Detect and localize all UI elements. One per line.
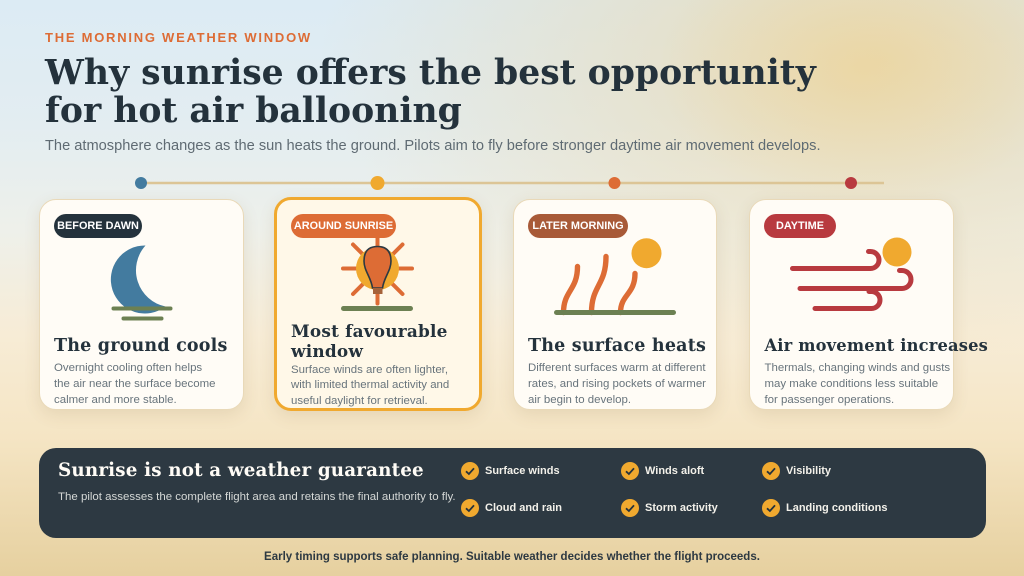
description [291,364,449,406]
description: for passenger operations. [764,394,894,406]
panel: daytime [749,198,954,410]
panel: later morning [512,198,716,410]
badge: around sunrise: AROUND SUNRISE [294,220,393,232]
heading: The surface heats [528,336,706,356]
item: cloud and rain [461,499,562,517]
item: landing conditions: Landing conditions [786,502,887,514]
heading: The ground cools [54,336,228,356]
description: Different surfaces warm at different [528,362,706,374]
description: may make conditions less suitable [764,378,938,390]
description: rates, and rising pockets of warmer [528,378,706,390]
icon: balloon and sun [341,238,414,306]
timeline [135,176,884,190]
kicker: THE MORNING WEATHER WINDOW [45,30,312,44]
item: surface winds [461,462,560,480]
panel heading: Sunrise is not a weather guarantee [58,460,424,481]
icon: rising thermals [554,238,676,316]
item: visibility: Visibility [786,465,831,477]
panel: weather guarantee [38,448,986,538]
panel description: The pilot assesses the complete flight area and retains the final authority to fly. [58,491,456,503]
badge: later morning: LATER MORNING [532,220,624,232]
description: Surface winds are often lighter, [291,364,448,376]
ground line [341,306,413,310]
description: the air near the surface become [54,378,216,390]
description [54,362,216,406]
heading: Air movement increases [764,336,988,354]
description: useful daylight for retrieval. [291,394,428,406]
checklist [461,462,888,517]
heading: Most favourable [291,321,448,341]
description: air begin to develop. [528,394,631,406]
item: visibility [762,462,831,480]
badge: later morning [528,214,628,238]
description: with limited thermal activity and [291,379,449,391]
item: surface winds: Surface winds [485,465,560,477]
footer note: Early timing supports safe planning. Suitable weather decides whether the flight proceeds. [264,550,760,562]
item: winds aloft: Winds aloft [645,465,704,477]
item: winds aloft [621,462,704,480]
badge: before dawn: BEFORE DAWN [57,220,139,232]
heading: window [291,341,363,361]
icon: moon [110,246,172,320]
item: storm activity: Storm activity [645,502,718,514]
subtitle: The atmosphere changes as the sun heats the ground. Pilots aim to fly before stronger daytime air movement develops. [45,138,821,154]
title: Why sunrise offers the best opportunity [45,52,816,92]
title: for hot air ballooning [45,90,462,130]
panel: around sunrise [274,197,482,411]
description [764,362,950,406]
heading [290,321,448,361]
badge: daytime: DAYTIME [776,220,824,232]
description: Overnight cooling often helps [54,362,202,374]
panel: before dawn [38,198,244,410]
badge: around sunrise [291,214,396,238]
item: cloud and rain: Cloud and rain [485,502,562,514]
description: calmer and more stable. [54,394,177,406]
description: Thermals, changing winds and gusts [764,362,950,374]
icon: wind and sun [790,238,914,311]
description [528,362,706,406]
title [44,52,817,130]
badge: daytime [764,214,836,238]
item: landing conditions [762,499,888,517]
item: storm activity [621,499,718,517]
badge: before dawn [54,214,142,238]
